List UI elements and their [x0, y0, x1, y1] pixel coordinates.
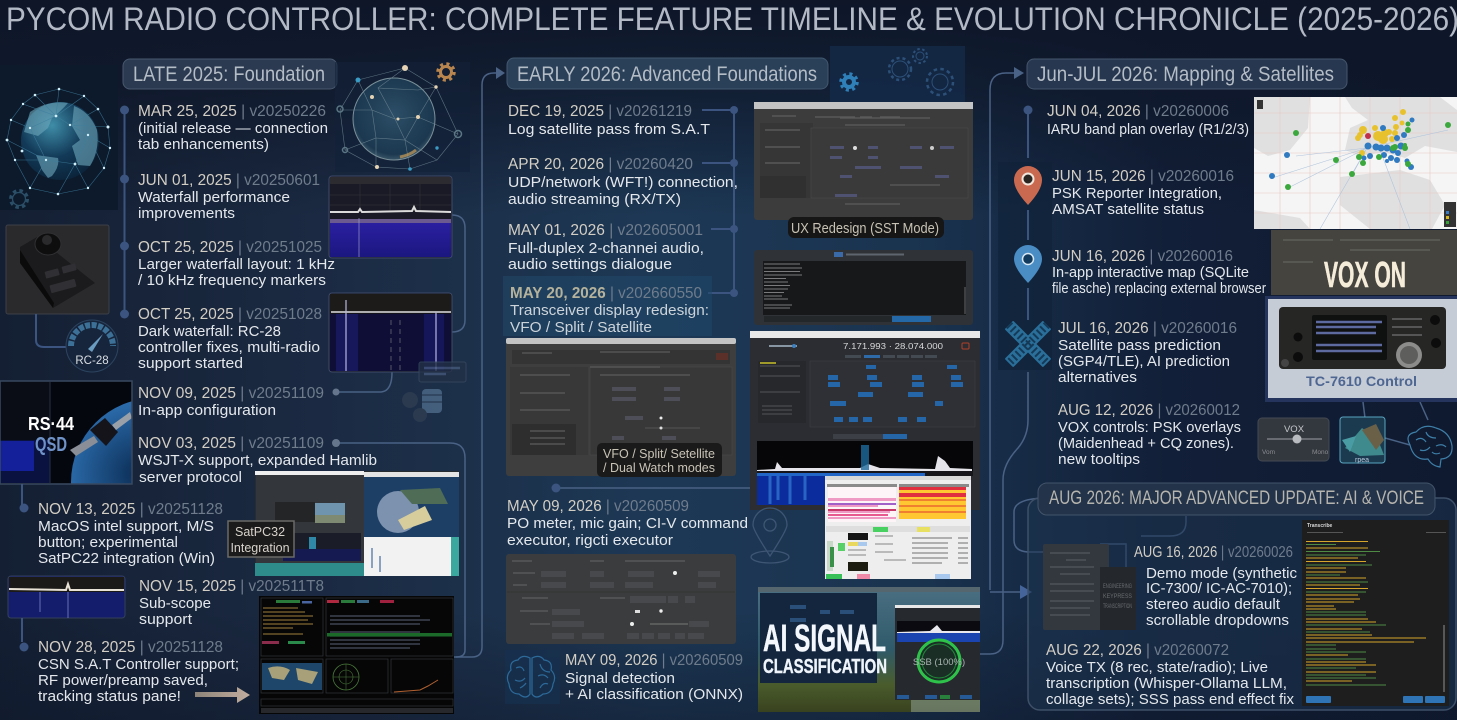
heading pill: JUN-JUL 2026: Jun-JUL 2026: Mapping & Satellites — [1037, 63, 1334, 86]
entry: MAR 25 2025: MAR 25, 2025 | v20250226 — [138, 103, 326, 120]
image: PO meter settings screenshot — [506, 554, 736, 644]
entry: JUN 01 2025: JUN 01, 2025 | v20250601 — [138, 172, 320, 189]
image: demo mode screens: TRANSCRIPTION — [1103, 604, 1132, 610]
entry: NOV 28 2025: RF power/preamp saved, — [38, 672, 208, 689]
image: status screenshot — [754, 250, 973, 325]
entry: AUG 16 2026: IC-7300/ IC-AC-7010); — [1146, 580, 1292, 597]
icon: small gear left — [10, 190, 28, 208]
image: RS-44 QSD satellite: RS·44 — [28, 414, 74, 434]
entry: JUN 16 2026 — [1052, 248, 1266, 297]
icon: brain right — [1408, 426, 1452, 467]
entry: JUN 04 2026: IARU band plan overlay (R1/2/3) — [1047, 121, 1249, 138]
image: SatPC32 screenshot — [255, 471, 459, 576]
entry: NOV 15 2025: support — [139, 611, 193, 628]
entry: MAY 09 2026 PO meter: executor, rigcti executor — [507, 532, 673, 549]
connector: sub-scope to NOV 28 — [21, 618, 23, 642]
entry: AUG 12 2026: (Maidenhead + CQ zones). — [1058, 435, 1234, 452]
image: TC-7610 control radio — [1265, 296, 1457, 402]
connector: RS-44 to NOV 13 — [21, 484, 23, 505]
image: AI signal classification: AI SIGNAL — [763, 618, 886, 660]
entry: NOV 13 2025: MacOS intel support, M/S — [38, 518, 214, 535]
image: sub-scope waterfall — [8, 576, 125, 618]
entry: AUG 16 2026: stereo audio default — [1146, 596, 1281, 613]
entry: NOV 03 2025: NOV 03, 2025 | v20251109 — [138, 435, 324, 452]
entry: JUN 16 2026: file asche) replacing external browser — [1052, 280, 1266, 297]
entry: OCT 25 2025 v20251025: Larger waterfall layout: 1 kHz — [138, 256, 335, 273]
icon: RC-28 gauge — [66, 320, 118, 372]
entry: DEC 19 2025: DEC 19, 2025 | v20261219 — [508, 103, 692, 120]
entry: MAY 01 2026 — [508, 222, 704, 273]
entry: JUN 15 2026 — [1052, 168, 1234, 218]
entry: JUN 01 2025 — [138, 172, 320, 222]
entry: DEC 19 2025: Log satellite pass from S.A.T — [508, 121, 710, 138]
widget: VOX slider: VOX — [1284, 424, 1305, 435]
connectors between sections — [336, 67, 1428, 657]
image: RS-44 QSD satellite: QSD — [35, 434, 67, 456]
entry: NOV 28 2025: CSN S.A.T Controller support; — [38, 656, 239, 673]
entry: APR 20 2026 — [508, 156, 738, 208]
label: UX Redesign: UX Redesign (SST Mode) — [791, 221, 939, 237]
section: AUG 2026 panel — [1028, 483, 1456, 710]
icon: gears panel — [830, 46, 965, 102]
timeline bracket — [702, 110, 734, 293]
image: demo mode screens — [1043, 544, 1136, 630]
label: VFO modes: VFO / Split/ Setellite — [603, 446, 715, 461]
icon: RC-28 gauge: RC-28 — [75, 355, 109, 367]
entry: MAY 20 2026: MAY 20, 2026 | v202660550 — [510, 285, 702, 302]
image: demo mode screens: ENGINEERING — [1103, 584, 1132, 590]
image: transcription window: Transcribe — [1307, 523, 1333, 529]
label: SatPC32 Integration: SatPC32 — [235, 525, 285, 539]
entry: NOV 03 2025 — [138, 435, 377, 486]
icon: orange gear — [438, 64, 454, 80]
image: TC-7610 control radio: TC-7610 Control — [1306, 374, 1417, 389]
icon: brain middle — [505, 650, 560, 704]
icon: zone map tile: rpea — [1355, 457, 1369, 464]
heading pill: AUG 2026 — [1038, 483, 1435, 515]
entry: NOV 09 2025: NOV 09, 2025 | v20251109 — [138, 385, 324, 402]
section: JUN-JUL 2026 — [990, 59, 1347, 468]
entry: OCT 25 2025 v20251028 — [138, 306, 322, 372]
image: VOX ON — [1271, 230, 1457, 295]
entry: JUN 04 2026 — [1047, 103, 1249, 138]
entry: MAY 09 2026 PO meter — [507, 498, 748, 549]
entry: JUN 15 2026: JUN 15, 2026 | v20260016 — [1052, 168, 1234, 185]
image: transcription window — [1302, 520, 1449, 706]
image: WSJT-X window — [825, 476, 971, 579]
image: AI signal classification: SSB (100%) — [913, 657, 965, 668]
entry: JUN 15 2026: PSK Reporter Integration, — [1052, 185, 1222, 202]
entry: NOV 15 2025: Sub-scope — [139, 595, 211, 612]
entry: NOV 09 2025 — [138, 385, 324, 419]
arrow: tracking pane to dashboard — [195, 687, 250, 703]
entry: APR 20 2026: audio streaming (RX/TX) — [508, 191, 681, 208]
entry: OCT 25 2025 v20251028: Dark waterfall: RC-28 — [138, 323, 281, 340]
entry: NOV 28 2025 — [38, 639, 239, 705]
entry: JUN 01 2025: Waterfall performance — [138, 189, 290, 206]
connector: device to gauge — [36, 314, 68, 347]
image: PSK reporter map — [1254, 97, 1457, 229]
entry: JUL 16 2026: Satellite pass prediction — [1058, 337, 1221, 354]
heading pill: EARLY 2026 — [507, 58, 828, 89]
image: main controller screenshot — [750, 331, 980, 510]
entry: AUG 16 2026: Demo mode (synthetic — [1146, 565, 1297, 582]
entry: NOV 28 2025: tracking status pane! — [38, 688, 181, 705]
entry: JUN 04 2026: JUN 04, 2026 | v20260006 — [1047, 103, 1229, 120]
widget: VOX slider: Mono — [1312, 449, 1329, 456]
entry: MAY 09 2026 signal detection — [565, 652, 743, 703]
image: AI signal classification — [758, 587, 980, 712]
entry: DEC 19 2025 — [508, 103, 710, 138]
entry: AUG 22 2026 — [1046, 642, 1294, 708]
entry: AUG 22 2026: collage sets); SSS pass end effect fix — [1046, 691, 1294, 708]
entry: MAY 09 2026 signal detection: Signal detection — [565, 670, 675, 687]
entry: MAY 01 2026: audio settings dialogue — [508, 256, 672, 273]
label: VFO modes — [597, 443, 722, 477]
entry: AUG 16 2026: AUG 16, 2026 | v20260026 — [1134, 544, 1293, 561]
entry: JUN 01 2025: improvements — [138, 205, 235, 222]
entry: OCT 25 2025 v20251028: OCT 25, 2025 | v20251028 — [138, 306, 322, 323]
entry: NOV 15 2025: NOV 15, 2025 | v202511T8 — [139, 578, 324, 595]
entry: AUG 16 2026: scrollable dropdowns — [1146, 612, 1289, 629]
entry: AUG 12 2026 — [1058, 402, 1241, 468]
entry: OCT 25 2025 v20251025 — [138, 239, 335, 289]
heading pill: EARLY 2026: EARLY 2026: Advanced Foundations — [517, 63, 817, 86]
pin column panel — [998, 162, 1052, 370]
entry: MAY 20 2026 — [503, 276, 712, 336]
image: VFO split screenshot — [506, 338, 736, 476]
icon: satellite X — [990, 306, 1066, 382]
heading pill: LATE 2025 — [123, 59, 337, 89]
image: UX redesign screenshot — [754, 102, 973, 220]
entry: MAY 09 2026 PO meter: PO meter, mic gain; CI-V command — [507, 515, 748, 532]
timeline rail — [124, 110, 126, 314]
entry: AUG 22 2026: AUG 22, 2026 | v20260072 — [1046, 642, 1229, 659]
entry: JUL 16 2026: (SGP4/TLE), AI prediction — [1058, 353, 1230, 370]
entry: NOV 03 2025: WSJT-X support, expanded Hamlib — [138, 452, 377, 469]
timeline dot — [1024, 106, 1032, 114]
icon: zone map tile — [1340, 417, 1385, 464]
entry: NOV 15 2025 — [139, 578, 324, 628]
label: UX Redesign — [788, 217, 944, 238]
connector: PO meter entry line — [552, 484, 750, 492]
entry: NOV 28 2025: NOV 28, 2025 | v20251128 — [38, 639, 223, 656]
image: waterfall 1 — [329, 176, 452, 258]
widget: VOX slider — [1258, 418, 1329, 461]
image: RC-28 controller device — [6, 225, 109, 314]
entry: JUL 16 2026: JUL 16, 2026 | v20260016 — [1058, 320, 1237, 337]
image: main controller screenshot: 7.171.993 · 28.074.000 — [843, 341, 943, 351]
entry: JUN 16 2026: In-app interactive map (SQLite — [1052, 264, 1249, 281]
image: waterfall 2 — [329, 293, 452, 372]
entry: OCT 25 2025 v20251028: support started — [138, 355, 243, 372]
entry: NOV 13 2025: NOV 13, 2025 | v20251128 — [38, 501, 223, 518]
bracket dots — [730, 106, 738, 297]
entry: AUG 16 2026 — [1134, 544, 1297, 629]
label: SatPC32 Integration — [228, 521, 294, 557]
heading pill: LATE 2025: LATE 2025: Foundation — [133, 63, 325, 86]
entry: MAY 09 2026 signal detection: MAY 09, 2026 | v20260509 — [565, 652, 743, 669]
entry: MAY 09 2026 signal detection: + AI classification (ONNX) — [565, 686, 743, 703]
entry: AUG 12 2026: AUG 12, 2026 | v20260012 — [1058, 402, 1240, 419]
entry: JUL 16 2026 — [1058, 320, 1237, 386]
entry: APR 20 2026: APR 20, 2026 | v20260420 — [508, 156, 693, 173]
entry: AUG 12 2026: VOX controls: PSK overlays — [1058, 419, 1241, 436]
icon: network globe left — [0, 65, 118, 210]
label: VFO modes: / Dual Watch modes — [603, 460, 715, 475]
section: LATE 2025 — [20, 59, 377, 705]
entry: MAY 09 2026 PO meter: MAY 09, 2026 | v20260509 — [507, 498, 689, 515]
timeline rail — [1027, 112, 1029, 320]
entry: JUL 16 2026: alternatives — [1058, 369, 1137, 386]
entry: NOV 09 2025: In-app configuration — [138, 402, 276, 419]
entry: OCT 25 2025 v20251025: OCT 25, 2025 | v20251025 — [138, 239, 322, 256]
entry: OCT 25 2025 v20251028: controller fixes, multi-radio — [138, 339, 320, 356]
icon: orange map pin — [1014, 166, 1042, 205]
entry: AUG 22 2026: transcription (Whisper-Ollama LLM, — [1046, 675, 1287, 692]
image: RS-44 QSD satellite — [0, 380, 133, 485]
entry: AUG 22 2026: Voice TX (8 rec, state/radio); Live — [1046, 659, 1268, 676]
section: EARLY 2026 — [503, 58, 828, 703]
entry: APR 20 2026: UDP/network (WFT!) connection, — [508, 174, 738, 191]
icon: server and database — [402, 362, 466, 422]
icon: constellation globe — [335, 62, 470, 172]
icon: location pin outline — [751, 508, 789, 563]
entry: NOV 13 2025: button; experimental — [38, 534, 178, 551]
timeline dots — [20, 106, 340, 652]
image: demo mode screens: KEYPRESS — [1103, 594, 1132, 600]
image: AI signal classification: CLASSIFICATION — [763, 656, 887, 678]
entry: MAY 01 2026: Full-duplex 2-channei audio, — [508, 240, 704, 257]
icon: blue map pin — [1014, 245, 1042, 283]
entry: OCT 25 2025 v20251025: / 10 kHz frequency markers — [138, 272, 326, 289]
entry: JUN 15 2026: AMSAT satellite status — [1052, 201, 1204, 218]
entry: AUG 12 2026: new tooltips — [1058, 451, 1140, 468]
label: SatPC32 Integration: Integration — [230, 541, 290, 555]
widget: VOX slider: Vom — [1262, 449, 1275, 456]
entry: MAY 20 2026: Transceiver display redesign: — [510, 302, 709, 319]
entry: NOV 13 2025 — [38, 501, 223, 567]
entry: MAY 20 2026: VFO / Split / Satellite — [510, 319, 652, 336]
entry: NOV 03 2025: server protocol — [139, 469, 242, 486]
entry: JUN 16 2026: JUN 16, 2026 | v20260016 — [1052, 248, 1233, 265]
image: SAT dashboard — [259, 596, 454, 714]
entry: MAR 25 2025 — [138, 103, 328, 153]
entry: MAR 25 2025: tab enhancements) — [138, 136, 269, 153]
entry: MAR 25 2025: (initial release — connection — [138, 120, 328, 137]
entry: NOV 13 2025: SatPC22 integration (Win) — [38, 550, 215, 567]
entry: MAY 01 2026: MAY 01, 2026 | v202605001 — [508, 222, 703, 239]
